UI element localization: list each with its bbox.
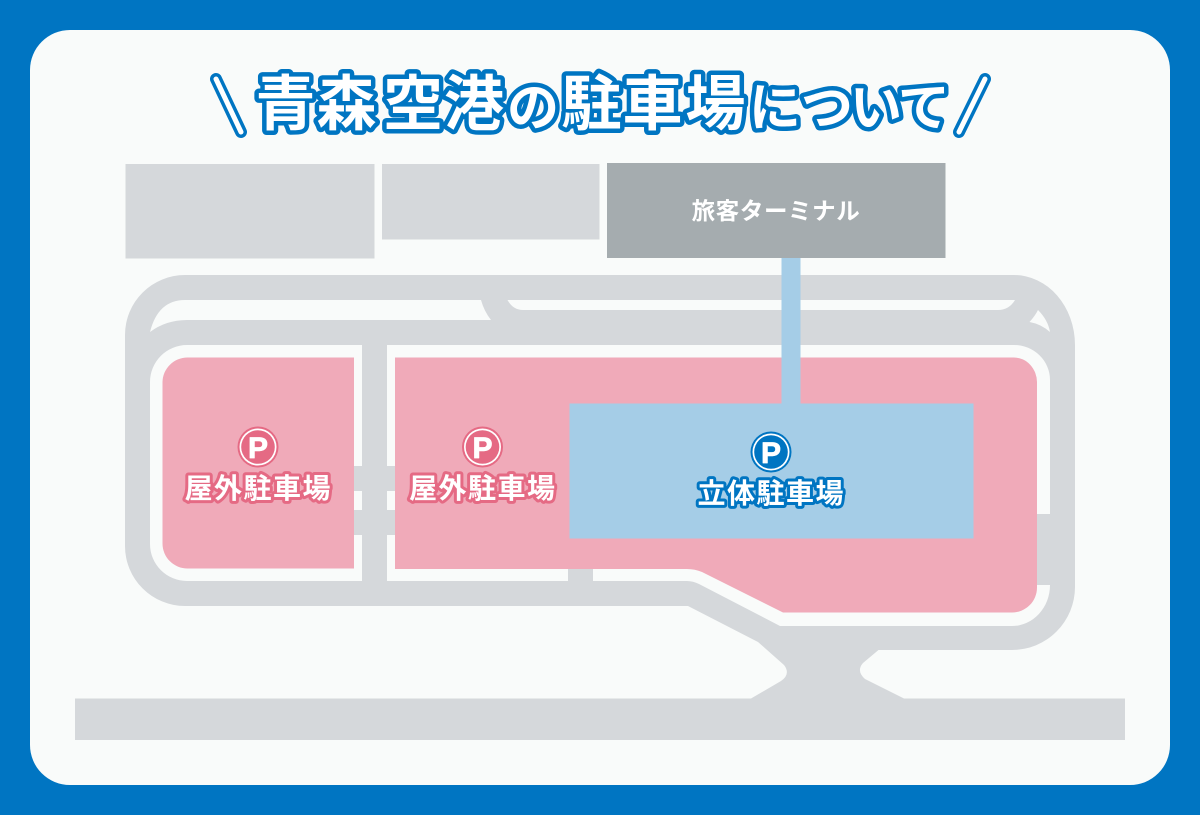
- icon: right title slash: [959, 79, 985, 132]
- panel: passenger terminal: [607, 163, 946, 258]
- road connectors: [354, 345, 1051, 585]
- panel: multi-storey parking: [570, 404, 974, 538]
- icon: parking right: P: [472, 432, 493, 465]
- road network: [75, 275, 1125, 740]
- title text: 駐車場: [562, 71, 746, 138]
- panel: outdoor parking right: [395, 358, 1037, 612]
- icon: parking centre: [750, 432, 792, 472]
- label: outdoor parking left: 屋外駐車場: [184, 473, 331, 504]
- icon: parking left: [238, 426, 278, 468]
- title text: の: [507, 80, 559, 138]
- icon: parking left: P: [248, 432, 268, 465]
- title text: について: [749, 80, 950, 138]
- panel: outdoor parking left: [162, 358, 354, 568]
- icon: parking centre: P: [761, 437, 781, 470]
- title text: 青森空港: [256, 71, 504, 138]
- road gaps: [150, 300, 1050, 626]
- terminal label: 旅客ターミナル: [692, 198, 860, 224]
- building: left block: [126, 164, 374, 258]
- title: [216, 71, 985, 138]
- building: middle block: [382, 164, 600, 240]
- label: outdoor parking right: 屋外駐車場: [409, 473, 555, 504]
- icon: left title slash: [216, 79, 241, 132]
- label: multi-storey parking: 立体駐車場: [698, 478, 844, 509]
- connector walkway: [782, 258, 800, 404]
- icon: parking right: [462, 426, 503, 468]
